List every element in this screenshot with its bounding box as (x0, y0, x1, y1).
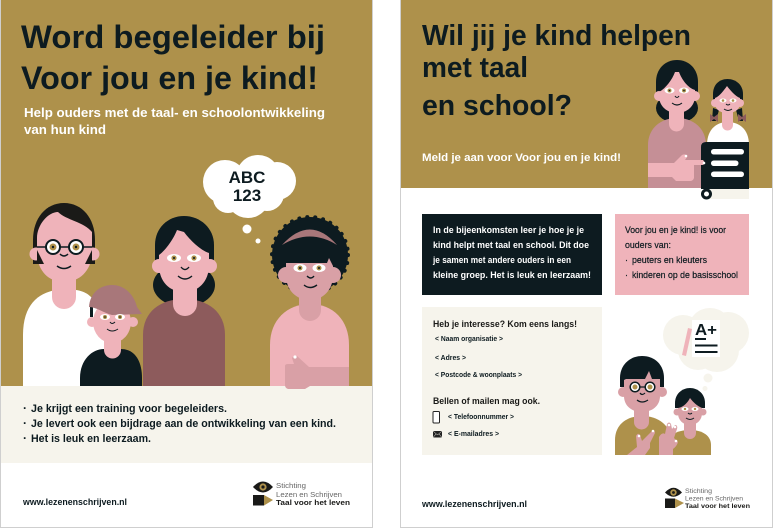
text: benefits list: · (23, 416, 27, 430)
panel: pink audience box: ouders van: (625, 240, 671, 250)
logo: right (665, 488, 750, 510)
panel: pink audience box: · (625, 270, 628, 280)
illustration: girl with pigtails (707, 79, 749, 160)
panel: left poster (0, 0, 372, 528)
panel: dark info box: In de bijeenkomsten leer je hoe je je (433, 225, 584, 235)
title: left poster: Voor jou en je kind! (21, 60, 318, 96)
panel: cream contact box: < Postcode & woonplaats > (435, 370, 523, 379)
title: right poster: Wil jij je kind helpen (422, 20, 691, 52)
panel: cream contact box: Bellen of mailen mag ook. (433, 396, 540, 407)
website url: left: www.lezenenschrijven.nl (22, 497, 127, 507)
illustration: boy with cap (80, 285, 142, 386)
text: benefits list: Het is leuk en leerzaam. (31, 433, 151, 445)
panel: cream contact box: < Naam organisatie > (435, 334, 504, 343)
panel: cream contact box: Heb je interesse? Kom eens langs! (433, 319, 577, 330)
logo: right: Lezen en Schrijven (685, 496, 743, 502)
text: benefits list: Je levert ook een bijdrage aan de ontwikkeling van een kind. (31, 418, 336, 430)
panel: left cream benefits band (1, 356, 372, 463)
subtitle: left poster: van hun kind (24, 123, 106, 137)
icon: thumbs up hand (285, 356, 349, 389)
panel: left gold header (1, 0, 372, 386)
panel: dark info box: je samen met andere ouders in een (432, 255, 571, 265)
thought bubble: ABC 123: 123 (233, 186, 261, 205)
illustration: mother pointing at list (648, 60, 706, 188)
panel: pink audience box: kinderen op de basisschool (632, 270, 738, 280)
icon: pointing hand (648, 154, 705, 181)
title: right poster: met taal (422, 52, 528, 84)
logo: left: Stichting (276, 483, 306, 490)
text: benefits list (23, 401, 336, 445)
icon: checklist board (701, 142, 749, 199)
subtitle: right poster: Meld je aan voor Voor jou en je kind! (422, 152, 621, 164)
text: benefits list: · (23, 401, 27, 415)
panel: pink audience box: · (625, 255, 628, 265)
website url: right: www.lezenenschrijven.nl (421, 499, 527, 509)
panel: cream contact box (422, 307, 602, 455)
panel: cream contact box: < Adres > (435, 353, 467, 362)
panel: dark info box (422, 214, 602, 295)
logo: left: Lezen en Schrijven (276, 492, 342, 499)
logo: right: Stichting (685, 488, 712, 495)
illustration: father and child with hands (615, 356, 711, 455)
panel: pink audience box (615, 214, 749, 295)
text: benefits list: · (23, 431, 27, 445)
thought bubble: A+ paper (663, 308, 749, 391)
title: left poster: Word begeleider bij (21, 19, 325, 55)
panel: cream contact box: < Telefoonnummer > (448, 412, 515, 421)
title: right poster: en school? (422, 90, 572, 122)
illustration: mother (143, 216, 225, 386)
thought bubble: A+ paper: A+ (695, 322, 717, 339)
logo: right: Taal voor het leven (685, 503, 750, 510)
icon: phone (433, 412, 440, 423)
panel: right poster (400, 0, 772, 528)
panel: right gold header (401, 0, 772, 188)
panel: dark info box: kind helpt met taal en school. Dit doe (433, 240, 589, 250)
thought bubble: ABC 123: ABC (229, 168, 265, 187)
panel: pink audience box: Voor jou en je kind! is voor (625, 225, 726, 235)
illustration: father with glasses (23, 203, 108, 386)
logo: left: Taal voor het leven (276, 500, 350, 507)
logo: left (253, 482, 350, 507)
thought bubble: ABC 123 (203, 155, 296, 244)
icon: envelope (433, 431, 442, 438)
subtitle: left poster (24, 106, 325, 137)
panel: pink audience box: peuters en kleuters (632, 255, 707, 265)
subtitle: left poster: Help ouders met de taal- en schoolontwikkeling (24, 106, 325, 120)
illustration: woman with curly hair (270, 217, 349, 386)
title: right poster (422, 20, 691, 122)
panel: dark info box: kleine groep. Het is leuk en leerzaam! (433, 270, 591, 280)
text: benefits list: Je krijgt een training voor begeleiders. (31, 403, 227, 415)
panel: cream contact box: < E-mailadres > (448, 429, 500, 438)
title: left poster (21, 19, 325, 96)
